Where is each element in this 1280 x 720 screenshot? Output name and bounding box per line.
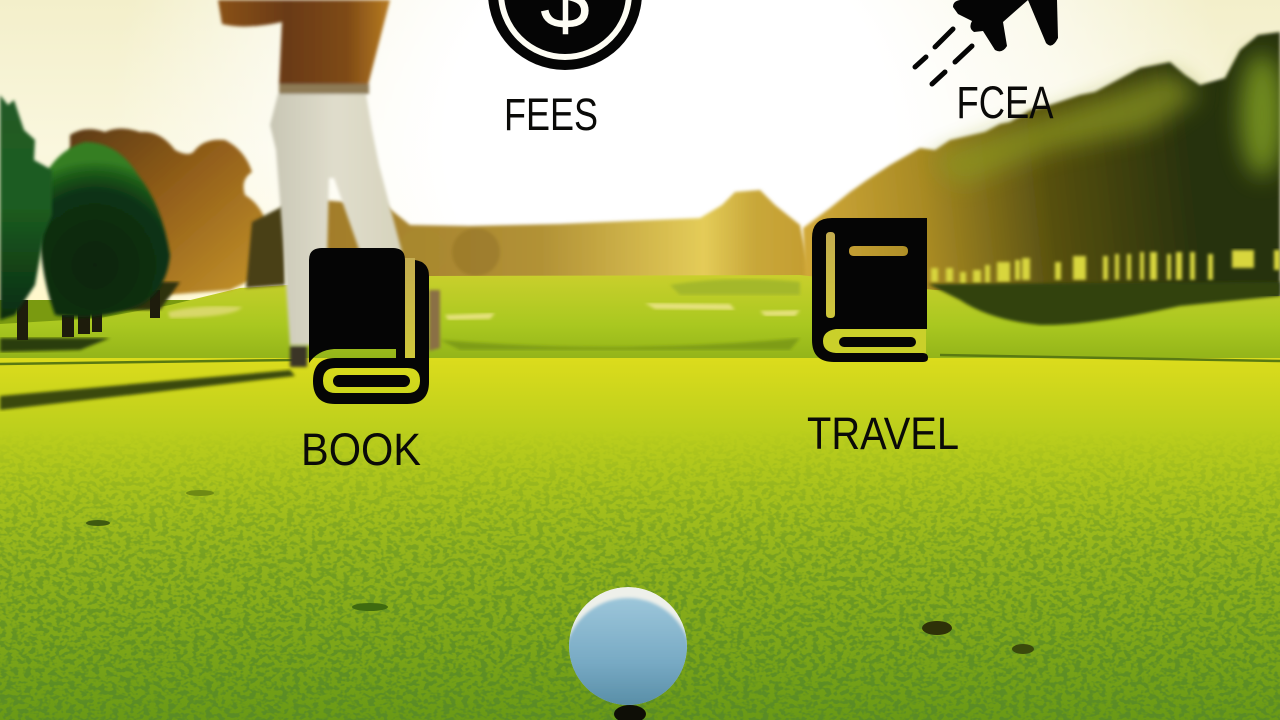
label: FCEA: FCEA bbox=[956, 77, 1054, 128]
icon: book left bbox=[309, 248, 429, 404]
background: sky bbox=[0, 0, 1280, 300]
sunlit canopy edge bbox=[930, 72, 1200, 185]
golfer: far shoe bbox=[429, 290, 440, 351]
icon: fees coin bbox=[488, 0, 642, 70]
label: FEES: FEES bbox=[504, 89, 598, 140]
background: foreground grass bbox=[0, 355, 1280, 720]
background: tree row on the right bbox=[803, 32, 1280, 298]
brown autumn trees bbox=[70, 128, 268, 300]
icon: plane bbox=[915, 0, 1058, 84]
golfer: belt bbox=[279, 84, 369, 94]
background: fairway bbox=[0, 275, 1280, 365]
golfer: shirt and arm bbox=[218, 0, 390, 85]
golfer: trousers bbox=[270, 94, 402, 345]
label: TRAVEL: TRAVEL bbox=[807, 408, 959, 459]
left trunks bbox=[17, 290, 160, 340]
speed lines bbox=[915, 29, 972, 84]
golfer bbox=[218, 0, 440, 367]
ball bbox=[569, 587, 687, 705]
gaps between trunks bbox=[931, 250, 1280, 284]
golf ball on tee bbox=[564, 587, 692, 720]
tee bbox=[614, 705, 646, 720]
background: distant tree line bbox=[320, 190, 812, 282]
icon: book right bbox=[812, 218, 928, 362]
golfer: shoe bbox=[290, 346, 307, 367]
label: BOOK: BOOK bbox=[301, 424, 421, 475]
background: trees on the left bbox=[0, 95, 285, 340]
